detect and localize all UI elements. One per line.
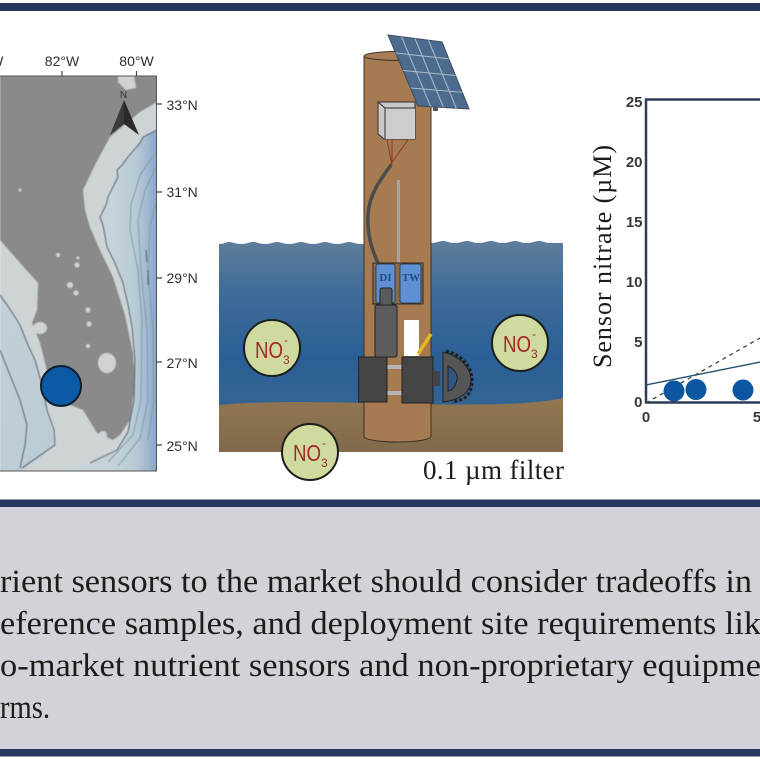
latitude labels: 29°N — [166, 270, 198, 286]
clamps — [358, 357, 440, 403]
y-axis title: Sensor nitrate (µM) — [588, 145, 617, 368]
filter label: 0.1 µm filter — [423, 455, 564, 485]
wiper wheel — [443, 351, 472, 402]
summary paragraph — [0, 564, 760, 726]
latitude labels: 25°N — [166, 438, 198, 454]
nitrate badge sediment — [282, 424, 338, 480]
panel: site map of Florida — [0, 53, 198, 471]
sediment — [219, 398, 563, 452]
nitrate badge left: - — [284, 333, 288, 347]
latitude labels: 31°N — [166, 184, 198, 200]
latitude labels: 27°N — [166, 355, 198, 371]
summary paragraph: rms. — [0, 690, 50, 726]
nitrate badge right: NO — [503, 331, 531, 357]
y-axis ticks: 20 — [626, 154, 642, 171]
regression lines — [646, 338, 760, 403]
map border — [0, 76, 156, 471]
summary paragraph: rient sensors to the market should consider tradeoffs in — [0, 564, 752, 600]
cable to sensor — [368, 139, 408, 263]
y-axis ticks: 25 — [626, 94, 642, 111]
bottom border bar — [0, 749, 760, 756]
junction box — [378, 102, 415, 139]
nitrate sensor body — [375, 288, 397, 357]
nitrate badge sediment: - — [322, 436, 326, 450]
nitrate badge right: - — [532, 327, 536, 341]
icon: north arrow: N — [120, 90, 127, 101]
divider bar above summary — [0, 500, 760, 507]
piling — [364, 52, 431, 442]
summary paragraph: o-market nutrient sensors and non-proprietary equipme — [0, 648, 760, 684]
top border bar — [0, 3, 760, 11]
yellow handle — [418, 334, 431, 354]
longitude labels: 82°W — [45, 53, 80, 69]
y-axis ticks: 10 — [626, 274, 642, 291]
y-axis ticks — [626, 94, 642, 411]
data points — [664, 379, 754, 402]
x-axis ticks — [642, 409, 760, 426]
icon: north arrow — [110, 90, 139, 135]
nitrate badge left — [244, 320, 300, 376]
nitrate badge right: 3 — [531, 347, 538, 361]
latitude labels: 33°N — [166, 97, 198, 113]
map frame and geography — [0, 76, 157, 471]
site marker — [41, 366, 81, 406]
nitrate badge left: 3 — [283, 353, 290, 367]
chart frame — [646, 100, 760, 402]
x-axis ticks: 0 — [642, 409, 650, 426]
y-axis ticks: 0 — [634, 394, 642, 411]
nitrate badge right — [492, 315, 548, 371]
y-axis ticks: 15 — [626, 214, 642, 231]
longitude labels: 80°W — [119, 53, 154, 69]
nitrate badge sediment: 3 — [321, 456, 328, 470]
summary paragraph: eference samples, and deployment site requirements lik — [0, 606, 760, 642]
latitude labels — [166, 97, 198, 454]
y-axis ticks: 5 — [634, 334, 642, 351]
panel: nitrate scatter chart — [588, 94, 760, 426]
reagent bottles: DI — [379, 272, 392, 284]
nitrate badge left: NO — [255, 337, 283, 363]
nitrate badge sediment: NO — [293, 440, 321, 466]
white filter cartridge — [404, 320, 419, 356]
icon: solar panel — [388, 35, 469, 111]
reagent bottles: TW — [402, 272, 420, 284]
panel: summary text — [0, 507, 760, 749]
longitude labels — [0, 53, 154, 69]
reagent bottles — [373, 263, 423, 304]
vertical rod — [397, 180, 400, 263]
panel: sensor deployment diagram — [219, 35, 564, 485]
map axis ticks — [62, 71, 162, 445]
water column — [219, 242, 371, 406]
